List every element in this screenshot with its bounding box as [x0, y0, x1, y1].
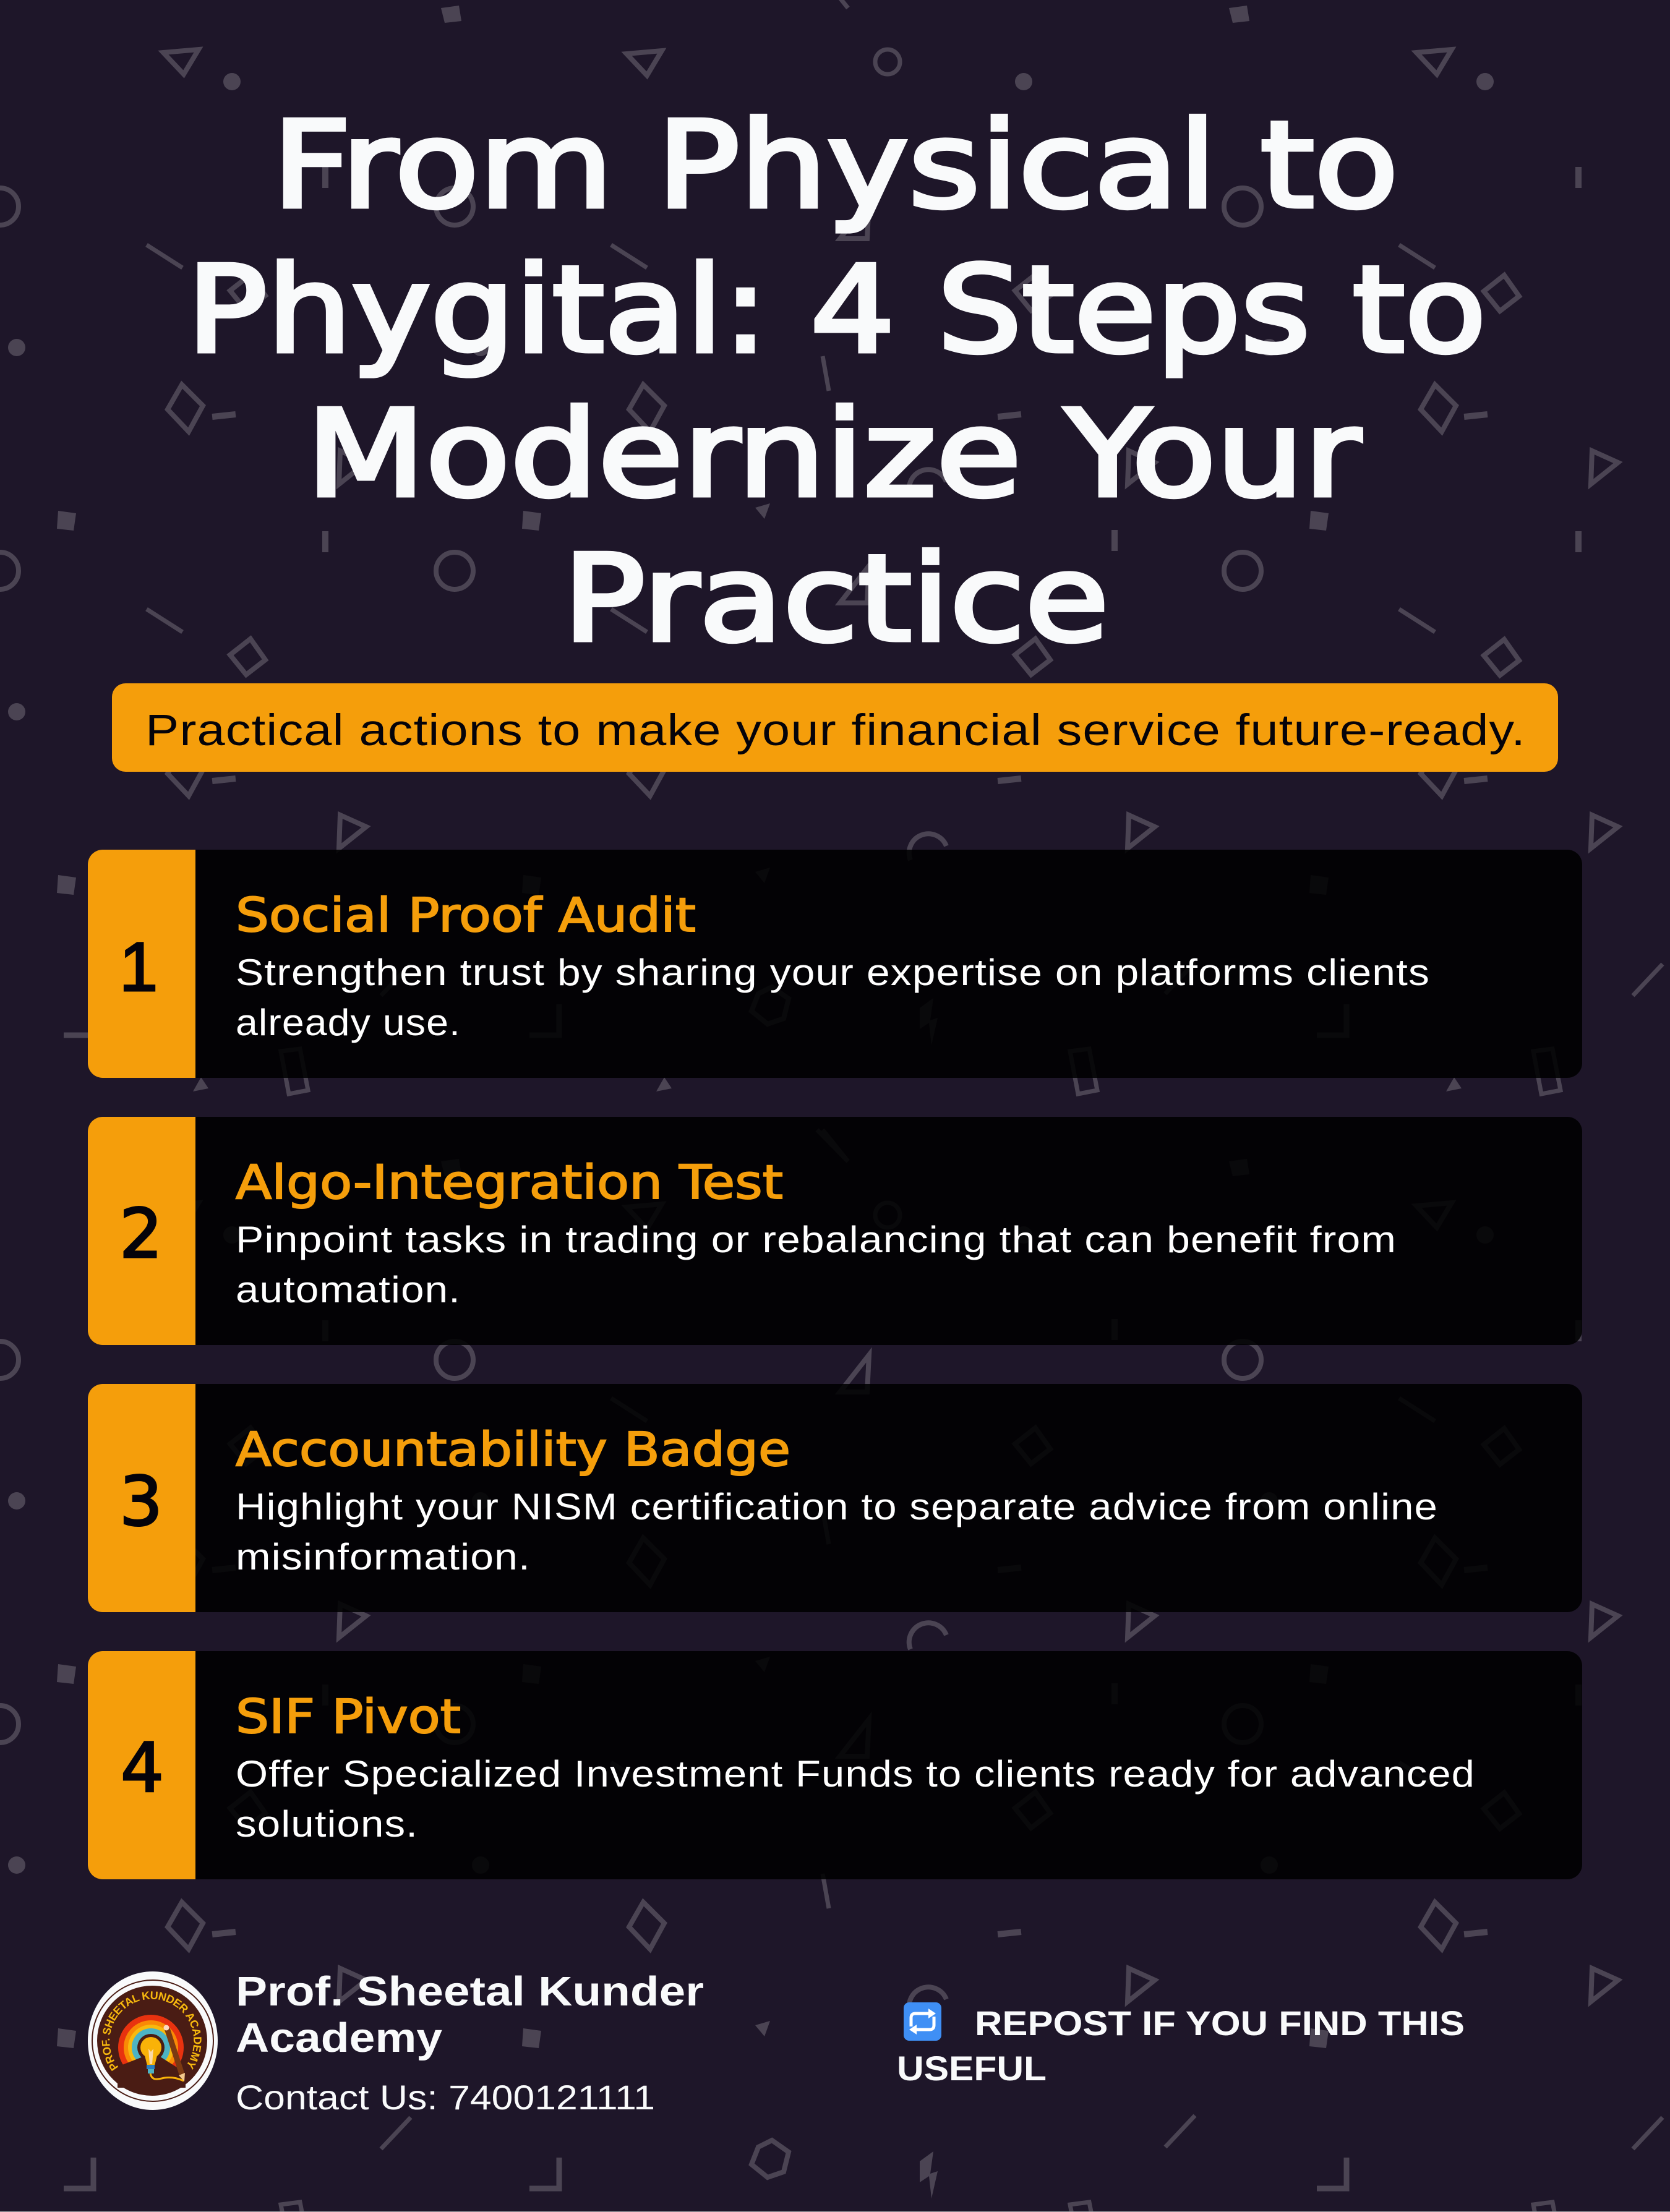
- title: Phygital: 4 Steps to: [187, 241, 1486, 380]
- number badge 2: [88, 1117, 195, 1345]
- repost call to action: REPOST IF YOU FIND THIS: [975, 2004, 1465, 2043]
- description 3: Highlight your NISM certification to separate advice from online: [236, 1486, 1438, 1527]
- title: Practice: [563, 529, 1109, 668]
- heading: SIF Pivot: SIF Pivot: [236, 1689, 461, 1744]
- panel: step 4: [88, 1651, 1582, 1879]
- number badge 1: 1: [119, 928, 158, 1006]
- heading: Accountability Badge: Accountability Badge: [236, 1422, 790, 1477]
- description 2: [236, 1219, 1397, 1310]
- number badge 2: 2: [119, 1194, 163, 1273]
- number badge 3: [88, 1384, 195, 1612]
- number badge 4: [88, 1651, 195, 1879]
- repost call to action: [897, 2004, 1465, 2088]
- description 4: solutions.: [236, 1803, 418, 1845]
- subtitle banner: [112, 683, 1558, 772]
- title: [187, 96, 1486, 668]
- description 4: Offer Specialized Investment Funds to clients ready for advanced: [236, 1753, 1475, 1795]
- description 1: already use.: [236, 1002, 461, 1043]
- heading: Social Proof Audit: Social Proof Audit: [236, 887, 696, 942]
- panel: step 1: [88, 850, 1582, 1078]
- number badge 4: 4: [121, 1728, 164, 1808]
- academy name and contact: Contact Us: 7400121111: [236, 2078, 655, 2117]
- panel: step 3: [88, 1384, 1582, 1612]
- academy name and contact: [236, 1968, 704, 2117]
- description 2: automation.: [236, 1269, 461, 1310]
- heading: Algo-Integration Test: Algo-Integration Test: [236, 1155, 783, 1210]
- description 1: [236, 952, 1430, 1043]
- number badge 1: [88, 850, 195, 1078]
- description 1: Strengthen trust by sharing your expertise on platforms clients: [236, 952, 1430, 993]
- logo badge: [88, 1971, 218, 2110]
- icon: repost: [904, 2002, 941, 2041]
- academy name and contact: Prof. Sheetal Kunder: [236, 1968, 704, 2015]
- number badge 3: 3: [119, 1462, 163, 1541]
- title: Modernize Your: [306, 385, 1361, 524]
- repost call to action: USEFUL: [897, 2049, 1047, 2088]
- description 4: [236, 1753, 1475, 1845]
- description 3: [236, 1486, 1438, 1578]
- title: From Physical to: [272, 96, 1398, 235]
- academy name and contact: Academy: [236, 2015, 442, 2061]
- panel: step 2: [88, 1117, 1582, 1345]
- subtitle banner: Practical actions to make your financial service future-ready.: [145, 706, 1526, 755]
- logo badge: PROF. SHEETAL KUNDER ACADEMY: [101, 1991, 202, 2072]
- description 3: misinformation.: [236, 1536, 531, 1578]
- description 2: Pinpoint tasks in trading or rebalancing that can benefit from: [236, 1219, 1397, 1260]
